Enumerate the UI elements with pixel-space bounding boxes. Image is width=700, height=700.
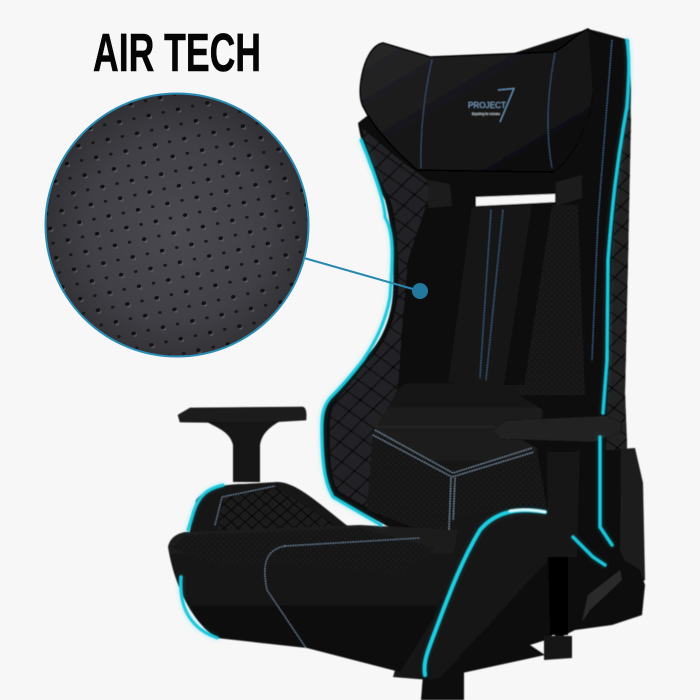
chair illustration <box>168 29 645 700</box>
seat stitching <box>215 486 420 648</box>
callout: leather texture close-up <box>46 94 308 356</box>
headrest side rim <box>553 29 604 172</box>
logo: PROJECT <box>468 101 506 110</box>
left quilted wing <box>330 128 430 515</box>
title: AIR TECH <box>93 24 261 83</box>
lumbar pillow <box>373 378 543 475</box>
cyan LED strips <box>181 40 629 675</box>
lower back mesh panel <box>367 432 547 540</box>
callout leader line <box>304 258 420 291</box>
logo: Esporting for veterans <box>472 112 500 116</box>
right mechanism <box>555 448 645 640</box>
left armrest <box>178 407 306 482</box>
right quilted side <box>606 60 631 450</box>
chair back silhouette <box>323 29 631 600</box>
back straps <box>426 204 552 385</box>
right armrest <box>493 416 622 660</box>
lumbar stitching <box>373 430 534 530</box>
headrest <box>360 29 600 172</box>
headrest brackets <box>428 175 582 208</box>
cyan LED strips glow <box>181 40 629 675</box>
seat cushion <box>168 525 458 672</box>
white gap behind headrest <box>476 194 555 206</box>
logo <box>468 88 514 122</box>
seat texture <box>172 528 435 575</box>
central back panel <box>396 195 590 400</box>
seat wing side panel <box>393 507 552 680</box>
left seat bolster <box>188 482 370 540</box>
callout dot <box>412 283 428 299</box>
headrest stitching <box>421 53 555 168</box>
mesh panels <box>432 205 585 395</box>
base cylinder <box>421 670 464 700</box>
back stitching <box>480 40 612 380</box>
